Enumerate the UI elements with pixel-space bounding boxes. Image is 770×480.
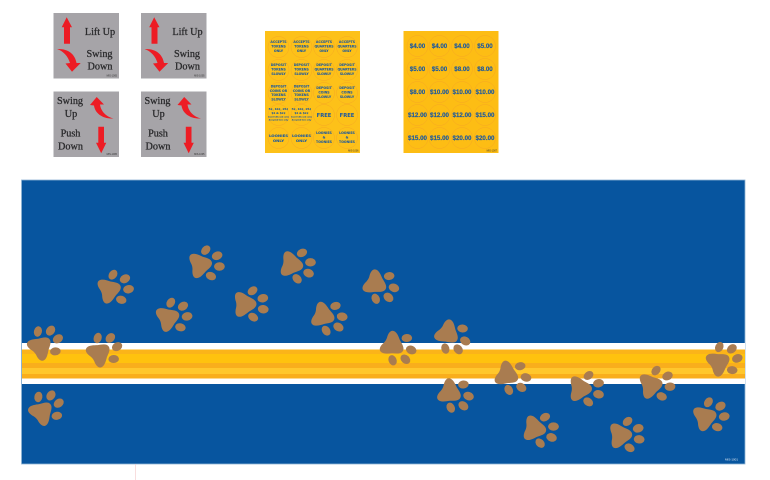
panel: price label sheet xyxy=(404,31,498,153)
label text: DEPOSIT xyxy=(294,63,310,67)
paw prints xyxy=(20,241,750,456)
text: sign 3 labels xyxy=(57,96,83,152)
label text: TOKENS xyxy=(294,68,309,72)
label text: COINS xyxy=(318,90,330,94)
text: sign 2 labels: Lift Up xyxy=(172,27,203,38)
label text: QUARTERS xyxy=(314,44,334,48)
price text: $8.00 xyxy=(454,66,470,73)
price text: $12.00 xyxy=(453,112,472,119)
price text: $5.00 xyxy=(477,43,493,50)
panel: lift up swing down sign 1 xyxy=(54,13,119,78)
text: sign 1 labels: Swing xyxy=(86,49,113,60)
label text: LOONIES xyxy=(292,133,311,138)
text: sign 4 labels: Swing xyxy=(144,96,171,107)
label text: ONLY xyxy=(274,49,284,53)
label text: SLOWLY xyxy=(317,95,332,99)
icon: red curved up arrow xyxy=(178,97,201,119)
price text: $10.00 xyxy=(430,89,450,96)
label text: ACCEPTS xyxy=(316,40,333,44)
label text: COINS OR xyxy=(293,89,311,93)
label text xyxy=(268,40,357,144)
label text: DEPOSIT xyxy=(294,84,310,88)
panel: swing up push down sign 2 xyxy=(141,92,206,157)
label text: QUARTERS xyxy=(314,68,334,72)
icon: red curved down arrow xyxy=(144,49,168,72)
text: sign 4 code: MIS-1005 xyxy=(194,153,205,156)
text: sign 3 labels: Swing xyxy=(57,96,83,107)
label text: 5¢, 10¢, 25¢ xyxy=(269,107,288,111)
price text: $5.00 xyxy=(432,66,448,73)
label circles xyxy=(268,36,358,148)
label text: LOONIES xyxy=(269,133,288,138)
label text: ONLY xyxy=(273,138,284,143)
label text: DEPOSIT xyxy=(339,86,356,90)
label text: Accepted here only xyxy=(292,118,312,122)
label text: QUARTERS xyxy=(337,44,357,48)
label text: DEPOSIT xyxy=(316,63,333,67)
label text: LOONIES xyxy=(316,131,333,135)
label text: QUARTERS xyxy=(337,68,357,72)
white and yellow stripe band xyxy=(22,343,745,384)
price text: $12.00 xyxy=(430,112,450,119)
label text: DEPOSIT xyxy=(271,84,287,88)
label text: TOKENS xyxy=(271,44,286,48)
text: sign 2 labels xyxy=(172,27,203,72)
panel: token label sheet xyxy=(265,31,360,153)
text: sign 2 labels: Down xyxy=(175,62,200,72)
price text: $20.00 xyxy=(453,135,472,142)
panel: lift up swing down sign 2 xyxy=(141,13,206,78)
label text: SLOWLY xyxy=(294,72,309,76)
price text: $15.00 xyxy=(408,135,428,142)
label text: $1 & $2¢ xyxy=(294,111,309,115)
label text: TOONIES xyxy=(316,140,333,144)
label text: DEPOSIT xyxy=(316,86,333,90)
text: sign 2 labels: Swing xyxy=(174,49,200,60)
icon: red up arrow xyxy=(149,17,160,44)
label text: ONLY xyxy=(297,49,307,53)
icon: red down arrow xyxy=(184,127,194,153)
label text: TOKENS xyxy=(294,44,309,48)
price text: $10.00 xyxy=(453,89,472,96)
text: sign 1 labels: Lift Up xyxy=(85,27,115,38)
price text: $15.00 xyxy=(476,112,495,119)
label text: & xyxy=(323,136,326,140)
label text: TOKENS xyxy=(271,68,286,72)
text: sign 3 labels: Up xyxy=(65,109,77,120)
label text: DEPOSIT xyxy=(271,63,287,67)
label text: Insert bills and coins xyxy=(291,116,312,118)
text: sign 1 labels: Down xyxy=(88,62,112,72)
label text: ONLY xyxy=(319,49,329,53)
label text: ONLY xyxy=(296,138,307,143)
text: sign 3 code: MIS-1005 xyxy=(107,153,118,156)
label text: SLOWLY xyxy=(340,72,355,76)
label text: $1 & $2¢ xyxy=(271,111,286,115)
text: sign 1 labels xyxy=(85,27,115,72)
label text: SLOWLY xyxy=(271,72,286,76)
label text: DEPOSIT xyxy=(339,63,356,67)
label text: TOKENS xyxy=(294,93,309,97)
label text: SLOWLY xyxy=(271,98,286,102)
label text: ACCEPTS xyxy=(270,40,287,44)
icon: red down arrow xyxy=(96,127,106,153)
panel: blue paw print banner xyxy=(20,180,750,464)
label text: Insert bills and coins xyxy=(268,116,289,118)
text: sign 4 labels: Down xyxy=(146,142,170,152)
icon: red curved up arrow xyxy=(90,97,114,119)
price text xyxy=(408,43,495,142)
text: sign 4 labels: Up xyxy=(152,109,165,120)
panel: swing up push down sign 1 xyxy=(54,92,119,157)
price text: $4.00 xyxy=(410,43,426,50)
price text: $12.00 xyxy=(408,112,428,119)
label text: FREE xyxy=(317,113,332,119)
label text: ACCEPTS xyxy=(293,40,310,44)
label text: FREE xyxy=(340,113,355,119)
price text: $8.00 xyxy=(410,89,426,96)
price text: $8.00 xyxy=(477,66,493,73)
label circles xyxy=(407,36,496,148)
price text: $15.00 xyxy=(430,135,450,142)
icon: red up arrow xyxy=(62,17,72,44)
label text: ONLY xyxy=(342,49,352,53)
text: banner code: MIS-1001 xyxy=(725,458,738,462)
text: sign 4 labels: Push xyxy=(148,129,168,140)
label text: TOKENS xyxy=(271,93,286,97)
text: sheet code: MIS-1006 xyxy=(348,150,359,152)
text: sign 3 labels: Down xyxy=(58,142,83,152)
text: sign 1 code: MIS-1005 xyxy=(107,74,118,78)
label text: ACCEPTS xyxy=(339,40,356,44)
label text: SLOWLY xyxy=(317,72,332,76)
price text: $20.00 xyxy=(476,135,495,142)
label text: SLOWLY xyxy=(294,98,309,102)
label text: 5¢, 10¢, 25¢ xyxy=(292,107,311,111)
price text: $4.00 xyxy=(432,43,448,50)
price text: $10.00 xyxy=(476,89,495,96)
label text: COINS OR xyxy=(270,89,288,93)
text: sign 2 code: MIS-1005 xyxy=(194,74,205,78)
label text: SLOWLY xyxy=(340,95,355,99)
label text: TOONIES xyxy=(339,140,356,144)
price text: $5.00 xyxy=(410,66,426,73)
text: sign 4 labels xyxy=(144,96,171,152)
price text: $4.00 xyxy=(454,43,470,50)
icon: red curved down arrow xyxy=(57,49,81,72)
label text: COINS xyxy=(341,90,353,94)
label text: Accepted here only xyxy=(269,118,289,122)
label text: LOONIES xyxy=(339,131,356,135)
text: sign 3 labels: Push xyxy=(61,129,80,140)
label text: & xyxy=(346,136,349,140)
text: sheet code: MIS-1007 xyxy=(487,150,498,152)
